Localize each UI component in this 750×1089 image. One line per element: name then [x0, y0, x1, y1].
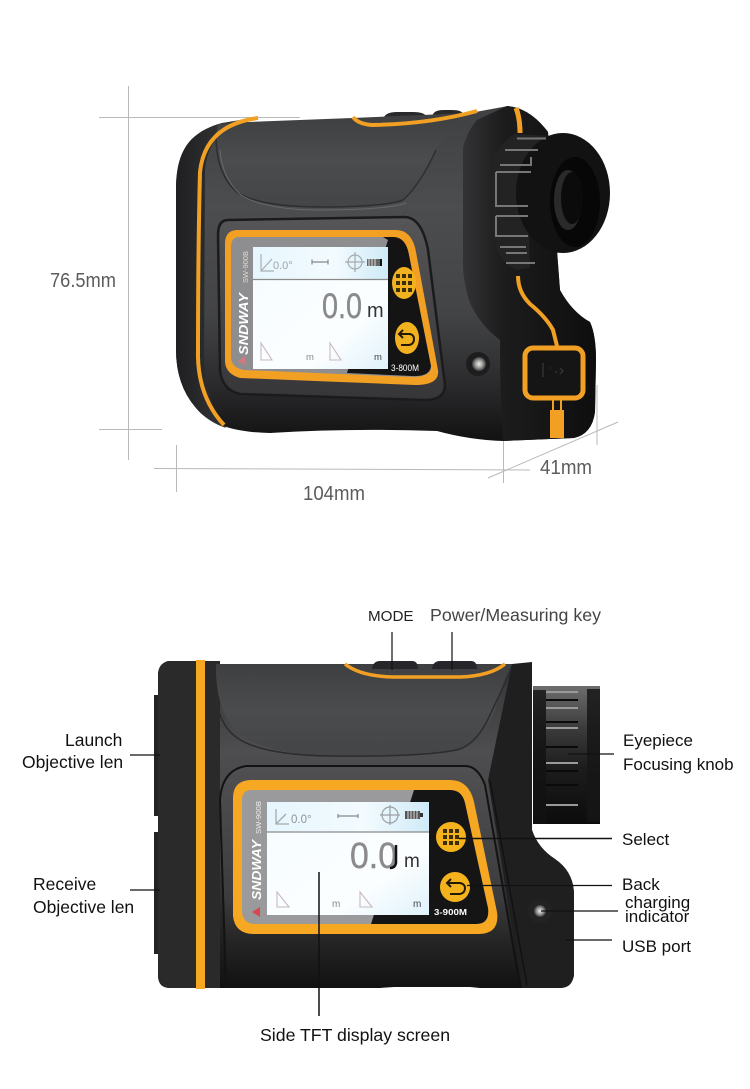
- orange vertical band: [196, 660, 205, 989]
- top buttons: [372, 661, 477, 669]
- angle value: 0.0°: [273, 260, 293, 272]
- label: Eyepiece Focusing knob: [623, 731, 734, 774]
- lcd screen: m: [413, 899, 421, 910]
- angle value: 0.0°: [291, 814, 312, 826]
- triangle icons: [261, 343, 341, 360]
- upper groove panel: [216, 114, 462, 207]
- range bar icon: [338, 814, 358, 818]
- rear dark panel: [488, 662, 574, 988]
- target icon: [345, 252, 365, 272]
- main reading: 0.0: [350, 835, 397, 876]
- menu button: [436, 822, 466, 852]
- eyepiece focusing knob: [533, 686, 600, 824]
- orange top trim: [345, 664, 505, 677]
- body shell: [158, 661, 574, 988]
- brand and model text: SW-900B: [254, 801, 263, 834]
- display recess: [218, 217, 445, 400]
- eyepiece: [490, 133, 610, 270]
- back button: [395, 322, 419, 354]
- label: Back: Back: [622, 875, 660, 894]
- label: charging indicator: [625, 893, 690, 926]
- unit m: m: [367, 300, 384, 322]
- angle icon: [276, 809, 289, 824]
- left dark cap: [176, 120, 240, 428]
- brand and model text: SNDWAY: [236, 292, 251, 355]
- range text: 3-800M: [391, 363, 419, 373]
- top buttons: [383, 110, 463, 120]
- upper groove panel: [216, 664, 512, 756]
- small unit labels: m: [332, 899, 340, 910]
- objective lens bumpers: [154, 695, 158, 954]
- label: Launch Objective len: Objective len: [22, 752, 123, 772]
- label: Select: Select: [622, 830, 670, 849]
- unit m: m: [404, 851, 420, 872]
- device: angled rangefinder: [176, 106, 610, 441]
- label: Receive Objective len: [33, 874, 134, 917]
- angle icon: [261, 254, 274, 271]
- main reading: 0.0: [322, 287, 362, 326]
- battery icon: [405, 811, 423, 819]
- brand and model text: [236, 251, 251, 365]
- orange top trim: [353, 111, 477, 125]
- brand and model text: SW-900B: [241, 251, 250, 283]
- label: Eyepiece Focusing knob: Eyepiece: [623, 731, 693, 750]
- dimension lines: top device: [99, 86, 618, 492]
- brand and model text: [250, 801, 264, 917]
- charging indicator: [466, 352, 490, 376]
- lcd screen: [253, 247, 388, 369]
- usb port cover: [525, 348, 583, 438]
- label: Receive Objective len: Receive: [33, 874, 96, 894]
- label: MODE: MODE: [368, 608, 414, 625]
- leader lines: [130, 632, 618, 1016]
- label: Receive Objective len: Objective len: [33, 897, 134, 917]
- menu button: [392, 267, 416, 299]
- display frame: [225, 230, 438, 385]
- label: charging indicator: charging: [625, 893, 690, 912]
- label: USB port: USB port: [622, 937, 691, 956]
- left dark cap: [158, 661, 220, 988]
- range text: 3-900M: [434, 907, 467, 917]
- annotated device: side view: [154, 660, 600, 989]
- small unit labels: m: [306, 352, 314, 363]
- label: height 76.5mm: 76.5mm: [50, 270, 116, 292]
- back button: [440, 872, 470, 902]
- triangle icons: [277, 892, 372, 907]
- label: width 104mm: 104mm: [303, 483, 365, 505]
- display recess: [220, 766, 520, 986]
- lcd screen: [267, 802, 429, 915]
- label: depth 41mm: 41mm: [540, 457, 592, 479]
- label: Power/Measuring key: Power/Measuring key: [430, 605, 601, 625]
- display inner panel: [242, 790, 488, 924]
- label: charging indicator: indicator: [625, 907, 690, 926]
- dark rear section: [463, 106, 596, 441]
- orange rear band upper: [516, 108, 520, 133]
- body shell: [176, 106, 596, 441]
- display frame: [233, 780, 497, 934]
- orange left band: [198, 118, 258, 425]
- orange rear band lower: [518, 276, 557, 346]
- charging indicator: [528, 899, 552, 923]
- label: Launch Objective len: Launch: [65, 730, 122, 750]
- label: Eyepiece Focusing knob: Focusing knob: [623, 755, 734, 774]
- target icon: [380, 805, 400, 825]
- brand and model text: SNDWAY: [250, 838, 264, 900]
- label: Launch Objective len: [22, 730, 123, 772]
- range bar icon: [312, 260, 328, 264]
- lcd screen: m: [374, 352, 382, 363]
- label: Side TFT display screen: Side TFT display screen: [260, 1025, 450, 1045]
- battery icon: [367, 259, 382, 266]
- display inner panel: [231, 237, 431, 377]
